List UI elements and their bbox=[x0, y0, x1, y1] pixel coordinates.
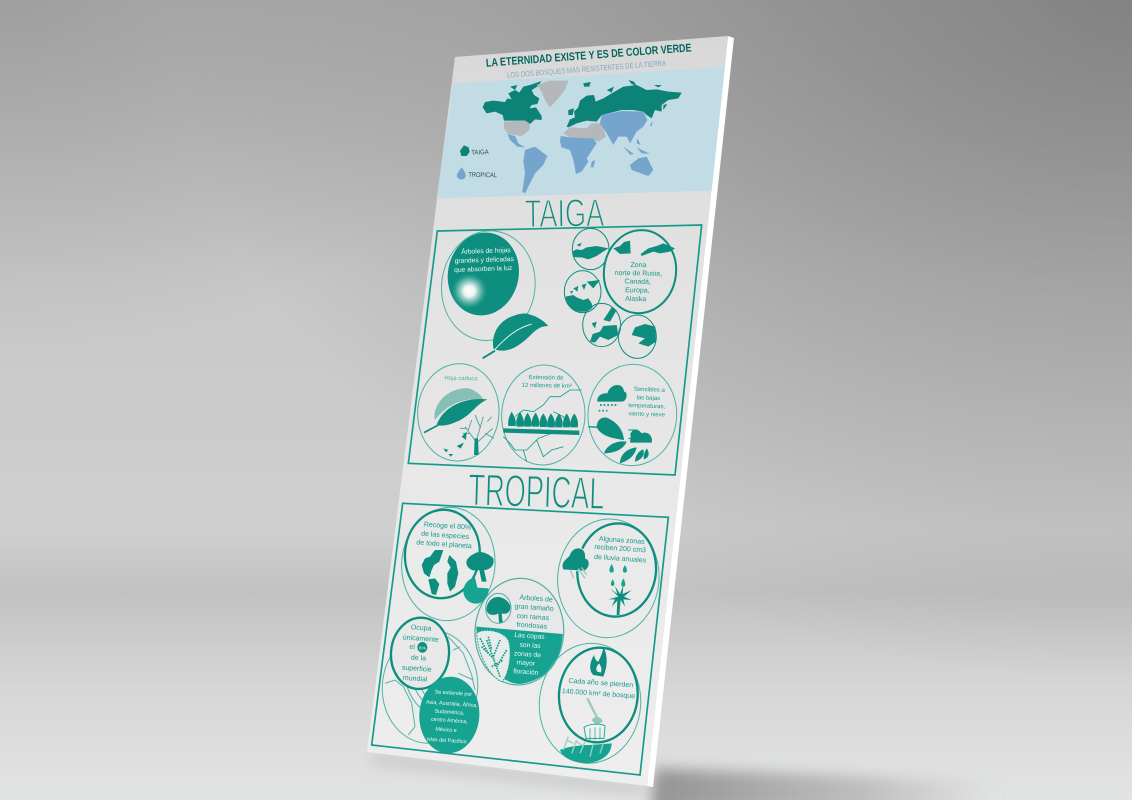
callout: northern zones: Alaska bbox=[625, 296, 646, 303]
circle: regions cluster bbox=[564, 225, 681, 358]
subtitle: LOS DOS BOSQUES MÁS RESISTENTES DE LA TIERRA bbox=[507, 59, 667, 80]
circle: leaves absorbing light: grandes y delicadas bbox=[455, 256, 515, 265]
circle: forest extension bbox=[499, 363, 588, 467]
callout: northern zones: Canadá, bbox=[624, 278, 651, 286]
callout: regions: Asia, Australia, África, bbox=[426, 699, 478, 709]
circle: sensitive to cold: Sensibles a bbox=[634, 387, 666, 394]
circle: biodiversity: Recoge el 80% bbox=[424, 521, 471, 532]
map circle: siberia bbox=[572, 228, 609, 270]
icon: leaf bbox=[483, 313, 548, 358]
callout: northern zones bbox=[599, 225, 681, 318]
heading: taiga: TAIGA bbox=[525, 191, 605, 236]
circle: surface and distribution: el bbox=[409, 644, 416, 651]
icon: 6% badge bbox=[417, 642, 427, 653]
icon: globe bbox=[419, 548, 459, 596]
circle: deforestation bbox=[534, 639, 646, 768]
callout: regions: islas del Pacífico bbox=[427, 737, 467, 745]
panel: tropical bbox=[372, 503, 668, 775]
icon: small tree circle bbox=[486, 593, 511, 623]
circle: big trees and canopy: Árboles de bbox=[519, 593, 553, 604]
circle: forest extension: Extensión de bbox=[529, 375, 564, 382]
callout: regions: centro América, bbox=[431, 717, 468, 725]
callout: regions bbox=[417, 675, 482, 755]
circle: surface and distribution: Ocupa bbox=[411, 624, 432, 633]
map: tropical regions bbox=[507, 111, 653, 193]
legend: taiga: TAIGA bbox=[471, 149, 489, 157]
legend: taiga bbox=[460, 145, 489, 157]
world map bbox=[483, 80, 682, 193]
panel: taiga bbox=[408, 225, 702, 475]
icon: rain drops bbox=[609, 564, 627, 587]
circle: deforestation: 140.000 km² de bosque bbox=[562, 688, 635, 700]
callout: regions: Se extiende por bbox=[435, 689, 472, 698]
board: infographic poster bbox=[367, 36, 728, 786]
map: other regions bbox=[504, 81, 606, 142]
header and world map section bbox=[437, 42, 725, 236]
panel border bbox=[372, 503, 668, 775]
callout: northern zones: Zona bbox=[630, 262, 646, 269]
circle: rainfall: de lluvia anuales bbox=[594, 554, 647, 565]
circle: biodiversity: de las especies bbox=[421, 531, 470, 541]
circle: deforestation: Cada año se pierden bbox=[568, 678, 633, 689]
circle: sensitive to cold bbox=[585, 362, 679, 468]
circle: big trees and canopy: con ramas bbox=[516, 613, 550, 622]
circle: deciduous leaf bbox=[414, 361, 502, 464]
icon: rain cloud bbox=[563, 548, 589, 571]
circle: deciduous leaf: Hoja caduca bbox=[444, 376, 478, 382]
circle: big trees and canopy: floración bbox=[513, 668, 539, 677]
legend: tropical: TROPICAL bbox=[468, 172, 497, 179]
circle: surface and distribution: únicamente bbox=[403, 634, 439, 644]
icon: filled circle bbox=[463, 577, 488, 604]
circle: big trees and canopy bbox=[471, 575, 567, 688]
circle: sensitive to cold: temperaturas, bbox=[628, 403, 666, 410]
panel border bbox=[408, 225, 702, 475]
callout: regions: Sudamérica, bbox=[434, 709, 465, 717]
circle: surface and distribution: de la bbox=[411, 654, 426, 663]
canopy band bbox=[476, 627, 563, 684]
circle: big trees and canopy: mayor bbox=[516, 659, 536, 668]
circle: big trees and canopy: frondosas bbox=[516, 622, 548, 631]
tree row bbox=[508, 412, 578, 427]
icon: burnt forest bbox=[560, 737, 612, 763]
legend: tropical bbox=[457, 167, 497, 179]
circle: big trees and canopy: gran tamaño bbox=[514, 603, 554, 613]
map circle: alaska bbox=[618, 315, 656, 358]
circle: rainfall: Algunas zonas bbox=[599, 536, 645, 546]
circle: surface and distribution bbox=[378, 615, 482, 755]
map lines bbox=[385, 637, 475, 735]
floor shadow of the board bbox=[372, 755, 1000, 800]
icon: canopy tree bbox=[477, 630, 510, 682]
title: LA ETERNIDAD EXISTE Y ES DE COLOR VERDE bbox=[486, 42, 692, 70]
map: taiga regions bbox=[483, 80, 682, 127]
callout: northern zones: Europa, bbox=[625, 287, 650, 295]
circle: leaves absorbing light: que absorben la luz bbox=[454, 265, 512, 274]
icon: tree bbox=[466, 552, 494, 582]
circle: surface and distribution: mundial bbox=[403, 675, 428, 684]
circle: sensitive to cold: viento y nieve bbox=[628, 411, 666, 419]
heading: tropical: TROPICAL bbox=[468, 464, 605, 519]
circle: rainfall bbox=[553, 515, 664, 642]
circle: leaves absorbing light: Árboles de hojas bbox=[461, 245, 512, 256]
circle: big trees and canopy: Las copas bbox=[514, 632, 545, 641]
circle: biodiversity bbox=[397, 503, 500, 625]
icon: axe and stump bbox=[584, 698, 605, 740]
map circle: europe bbox=[583, 303, 621, 347]
circle: leaves absorbing light bbox=[434, 225, 542, 347]
board: white side edge bbox=[647, 36, 734, 787]
map background bbox=[437, 67, 725, 198]
circle: big trees and canopy: son las bbox=[519, 642, 542, 650]
circle: sensitive to cold: las bajas bbox=[636, 395, 660, 402]
circle: biodiversity: de todo el planeta bbox=[416, 539, 472, 550]
map circle: canada bbox=[564, 271, 601, 313]
callout: regions: México e bbox=[435, 727, 457, 734]
circle: rainfall: reciben 200 cm3 bbox=[594, 544, 646, 554]
circle: big trees and canopy: zonas de bbox=[514, 650, 541, 659]
callout: northern zones: norte de Rusia, bbox=[615, 270, 662, 278]
icon: flame bbox=[590, 647, 607, 677]
icon: 6% badge: 6% bbox=[419, 645, 426, 651]
circle: forest extension: 12 millones de km² bbox=[522, 383, 572, 390]
circle: surface and distribution: superficie bbox=[402, 665, 432, 674]
icon: palm bbox=[608, 585, 632, 615]
